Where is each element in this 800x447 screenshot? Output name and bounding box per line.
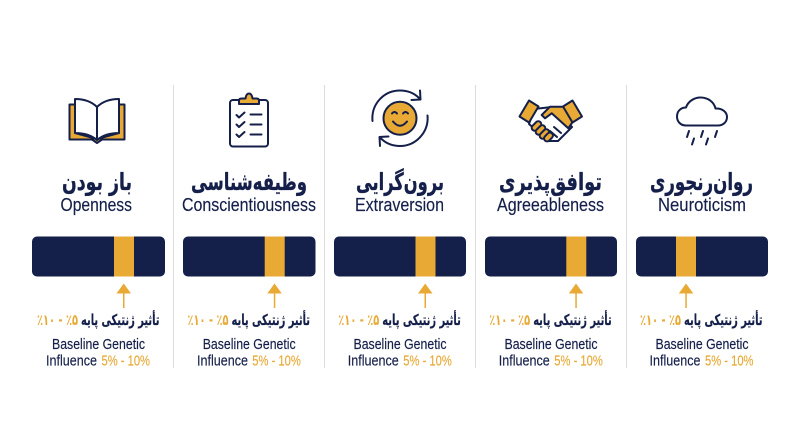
English influence label: Influence xyxy=(650,352,700,370)
English influence label xyxy=(197,336,301,370)
panel: Agreeableness xyxy=(485,100,617,370)
English influence label xyxy=(348,336,452,370)
English influence label: Influence xyxy=(46,352,97,370)
English influence label: Influence xyxy=(348,352,399,370)
English influence label: Baseline Genetic xyxy=(504,336,598,353)
English influence label: 5% - 10% xyxy=(102,352,150,370)
Persian influence label: تأثیر ژنتیکی پایه xyxy=(533,310,612,330)
bar xyxy=(334,236,466,276)
heading: English title: Neuroticism xyxy=(658,195,746,215)
Persian influence label: ٪۵ - ٪۱۰ xyxy=(489,311,530,329)
heading: Persian title: روان‌رنجوری xyxy=(650,168,753,196)
arrow xyxy=(267,284,282,308)
English influence label: 5% - 10% xyxy=(403,352,452,370)
Persian influence label: تأثیر ژنتیکی پایه xyxy=(81,310,160,330)
heading: Persian title: وظیفه‌شناسی xyxy=(191,168,307,196)
English influence label xyxy=(499,336,603,370)
English influence label: Baseline Genetic xyxy=(203,336,296,353)
English influence label: Influence xyxy=(499,352,550,370)
Persian influence label: ٪۵ - ٪۱۰ xyxy=(188,311,228,329)
arrow xyxy=(569,284,583,308)
Persian influence label: ٪۵ - ٪۱۰ xyxy=(640,311,681,329)
icon: handshake xyxy=(520,100,582,143)
English influence label: Influence xyxy=(197,352,248,370)
English influence label xyxy=(46,336,150,370)
heading: English title: Extraversion xyxy=(355,195,444,215)
English influence label: Baseline Genetic xyxy=(354,336,447,353)
Persian influence label xyxy=(489,310,612,330)
icon: clipboard checklist xyxy=(230,94,268,146)
bar xyxy=(636,236,768,276)
Persian influence label xyxy=(188,310,310,330)
English influence label: 5% - 10% xyxy=(554,352,603,370)
heading: Persian title: برون‌گرایی xyxy=(356,168,444,196)
Persian influence label: تأثیر ژنتیکی پایه xyxy=(684,310,762,330)
Persian influence label xyxy=(37,310,160,330)
Persian influence label xyxy=(338,310,461,330)
arrow xyxy=(679,284,693,308)
bar xyxy=(485,236,617,276)
icon: smiley with circular arrows xyxy=(372,90,428,146)
panel: Extraversion xyxy=(334,90,466,370)
English influence label: Baseline Genetic xyxy=(656,336,749,353)
icon: open book xyxy=(70,99,124,143)
Persian influence label xyxy=(640,310,762,330)
panel: Neuroticism xyxy=(636,98,768,370)
arrow xyxy=(116,284,131,308)
panel: Conscientiousness xyxy=(182,94,316,370)
icon: rain cloud xyxy=(677,98,727,144)
bar xyxy=(183,236,316,276)
Persian influence label: ٪۵ - ٪۱۰ xyxy=(37,311,78,329)
English influence label: Baseline Genetic xyxy=(52,336,145,353)
English influence label: 5% - 10% xyxy=(705,352,754,370)
English influence label: 5% - 10% xyxy=(252,352,301,370)
panel: Openness xyxy=(32,99,165,370)
arrow xyxy=(418,284,432,308)
English influence label xyxy=(650,336,754,370)
heading: English title: Agreeableness xyxy=(497,195,604,215)
bar xyxy=(32,236,165,276)
heading: Persian title: توافق‌پذیری xyxy=(499,168,602,196)
heading: English title: Conscientiousness xyxy=(182,195,316,215)
heading: English title: Openness xyxy=(60,195,132,215)
Persian influence label: ٪۵ - ٪۱۰ xyxy=(338,311,379,329)
Persian influence label: تأثیر ژنتیکی پایه xyxy=(232,310,310,330)
Persian influence label: تأثیر ژنتیکی پایه xyxy=(382,310,461,330)
heading: Persian title: باز بودن xyxy=(62,168,132,196)
